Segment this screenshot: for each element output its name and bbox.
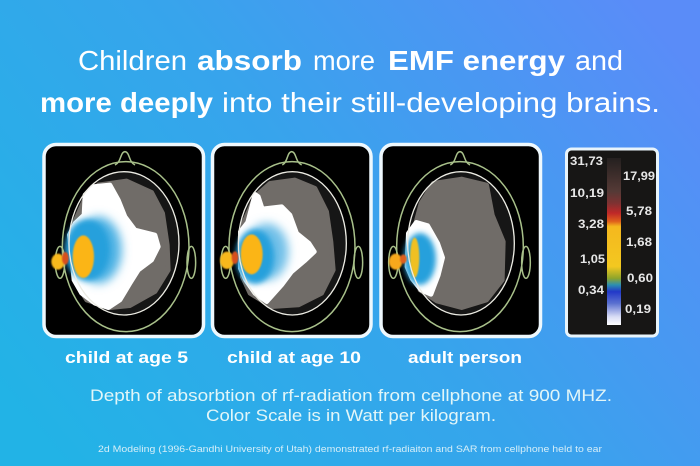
scale labels: 1,05	[580, 252, 605, 266]
ears	[221, 246, 363, 278]
scale labels: 3,28	[578, 217, 604, 231]
absorption: yellow core	[410, 238, 419, 278]
title: EMF energy	[388, 45, 565, 76]
absorption: yellow core	[241, 234, 263, 274]
head outline	[229, 152, 355, 332]
absorption: white zone	[407, 222, 443, 294]
skull line	[408, 172, 514, 315]
title: more deeply	[40, 87, 213, 118]
colour bar	[607, 158, 621, 325]
brain tissue	[242, 180, 333, 307]
ears	[55, 246, 196, 278]
title: more	[313, 45, 375, 76]
source note: 2d Modeling (1996-Gandhi University of Utah) demonstrated rf-radiaiton and SAR from cellphone held to ear	[98, 444, 602, 454]
phone contact hot spot	[389, 254, 402, 270]
phone contact hot spot	[220, 252, 234, 269]
brain tissue	[414, 179, 503, 308]
scale labels: 1,68	[626, 235, 652, 249]
title	[40, 45, 660, 118]
skull interior	[69, 172, 179, 315]
scale labels: 0,34	[578, 283, 604, 297]
scale labels: 10,19	[570, 186, 604, 200]
panel captions: child at age 10	[227, 349, 361, 367]
scale labels: 31,73	[570, 154, 603, 168]
ears	[389, 246, 530, 278]
title: absorb	[197, 45, 302, 76]
head outline	[397, 152, 523, 332]
title: into their still-developing brains.	[222, 87, 660, 118]
skull line	[69, 172, 179, 315]
scale labels: 17,99	[623, 169, 655, 183]
panel captions	[65, 349, 522, 367]
title: and	[575, 45, 623, 76]
panel captions: child at age 5	[65, 349, 188, 367]
skull interior	[238, 172, 346, 315]
absorption: blue zone	[245, 223, 288, 280]
scale labels	[570, 154, 655, 316]
description text: Depth of absorbtion of rf-radiation from cellphone at 900 MHZ.	[90, 386, 612, 405]
scale labels: 0,60	[627, 271, 653, 285]
absorption: white zone	[240, 194, 314, 302]
absorption: blue zone	[404, 233, 436, 285]
phone contact hot spot	[51, 254, 65, 270]
scale labels: 5,78	[626, 204, 652, 218]
head outline	[62, 152, 189, 332]
title: Children	[78, 45, 187, 76]
absorption: blue zone	[75, 217, 122, 283]
description text: Color Scale is in Watt per kilogram.	[206, 406, 496, 425]
absorption: yellow core	[73, 235, 94, 278]
absorption: white zone	[69, 185, 158, 308]
scale labels: 0,19	[625, 302, 651, 316]
panel: adult person	[381, 144, 540, 336]
panel: colour scale legend	[566, 149, 658, 336]
skull interior	[408, 172, 514, 315]
brain tissue	[73, 181, 168, 308]
panel: child at age 10	[212, 144, 371, 336]
panel: child at age 5	[44, 144, 204, 336]
description text	[90, 386, 612, 425]
panel captions: adult person	[408, 349, 522, 367]
skull line	[238, 172, 346, 315]
